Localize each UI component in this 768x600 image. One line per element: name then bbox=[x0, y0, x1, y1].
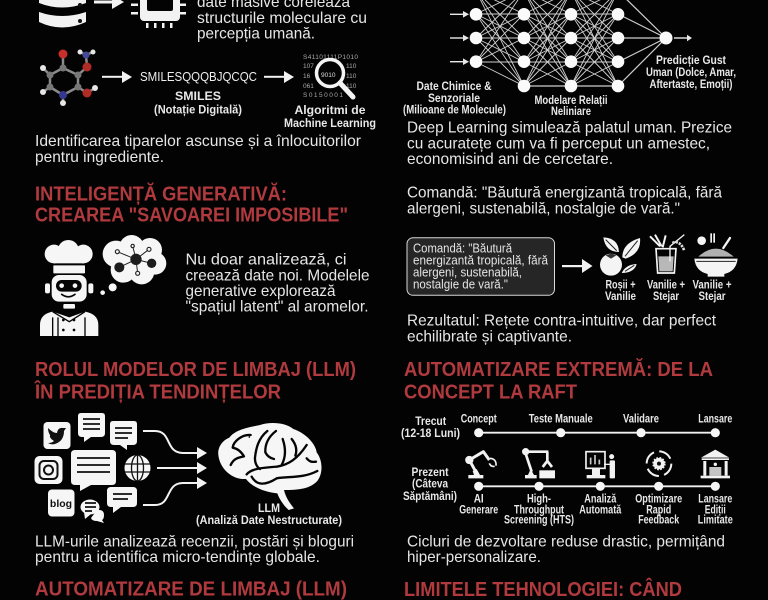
label: machine learning algorithm: Algoritmi de bbox=[294, 105, 366, 117]
label: LLM: (Analiză Date Nestructurate) bbox=[196, 515, 342, 527]
label: present period bbox=[403, 467, 457, 503]
label: present steps: Feedback bbox=[638, 514, 680, 526]
icon: robot chef bbox=[40, 240, 98, 336]
label: present steps: Automată bbox=[579, 504, 622, 516]
icon: processor chip bbox=[131, 0, 186, 28]
arrow: molecule to SMILES bbox=[102, 71, 132, 83]
label: human taste prediction bbox=[646, 55, 736, 91]
label: machine learning algorithm bbox=[284, 105, 376, 130]
chart: past timeline: Concept bbox=[461, 413, 497, 425]
text: deep learning: Deep Learning simulează palatul uman. Prezice bbox=[407, 120, 732, 137]
label: present steps: Rapid bbox=[646, 504, 671, 516]
icon: binary data with magnifier: 9010 bbox=[321, 72, 336, 79]
label: SMILES notation: SMILES bbox=[175, 91, 221, 103]
label: chemical and sensory data: (Milioane de Molecule) bbox=[403, 105, 506, 117]
panel: data correlation top left bbox=[39, 0, 367, 42]
label: SMILES notation bbox=[154, 91, 242, 117]
label: chemical and sensory data bbox=[403, 81, 506, 117]
text: pattern identification bbox=[35, 133, 362, 166]
heading: generative intelligence bbox=[35, 182, 348, 226]
label: ingredient pairs bbox=[605, 280, 732, 303]
callout: prompt box: energizantă tropicală, fără bbox=[413, 253, 548, 267]
label: ingredient pairs: Roșii + bbox=[606, 280, 636, 292]
label: ingredient pairs: Vanilie + bbox=[647, 280, 685, 292]
label: present steps: AI bbox=[474, 494, 484, 506]
arrow: database to chip bbox=[94, 0, 124, 9]
label: ingredient pairs: Stejar bbox=[698, 291, 726, 303]
arrows: neural network inputs and output bbox=[450, 11, 692, 65]
heading: extreme automation bbox=[404, 358, 713, 404]
label: past period: Trecut bbox=[415, 416, 446, 428]
icon: robot arm bbox=[467, 452, 496, 478]
heading: extreme automation: AUTOMATIZARE EXTREMĂ: DE LA bbox=[404, 358, 713, 381]
label: machine learning algorithm: Machine Learning bbox=[284, 118, 376, 130]
text: SMILES string: SMILESQQQBJQCQC bbox=[140, 70, 257, 84]
label: human taste prediction: Predicție Gust bbox=[656, 55, 726, 67]
heading: extreme automation: CONCEPT LA RAFT bbox=[404, 382, 577, 404]
text: LLM analysis: pentru a identifica micro-tendințe globale. bbox=[35, 549, 320, 566]
text: result: echilibrate și captivante. bbox=[407, 328, 572, 345]
chart: present timeline bbox=[474, 482, 720, 491]
heading: language models role bbox=[34, 359, 356, 404]
arrow: prompt to recipes bbox=[562, 259, 592, 273]
text: data correlation: percepția umană. bbox=[197, 26, 315, 42]
icon: binary data with magnifier: 107 bbox=[303, 63, 314, 70]
panel: neural network bbox=[403, 0, 736, 168]
text: LLM analysis bbox=[35, 534, 354, 566]
text: result: Rezultatul: Rețete contra-intuitive, dar perfect bbox=[407, 312, 717, 329]
label: present steps: Generare bbox=[459, 504, 498, 516]
icon: launch building bbox=[701, 450, 730, 478]
label: present steps: Ediții bbox=[705, 504, 726, 516]
callout: prompt box: alergeni, sustenabilă, bbox=[413, 266, 522, 280]
text: data correlation: structurile moleculare cu bbox=[197, 10, 367, 27]
icon: binary data with magnifier bbox=[303, 54, 358, 99]
icon: thought cloud with molecule bbox=[100, 235, 166, 295]
chart: neural network connections bbox=[476, 0, 666, 86]
label: LLM: LLM bbox=[258, 503, 280, 515]
label: present steps: Screening (HTS) bbox=[504, 514, 574, 526]
label: human taste prediction: Uman (Dolce, Amar, bbox=[646, 67, 736, 79]
panel: prompt to recipes bbox=[407, 185, 738, 345]
chart: neural network nodes bbox=[470, 8, 672, 92]
callout: prompt box: nostalgie de vară." bbox=[413, 278, 508, 292]
icon: binary data with magnifier: 110 bbox=[346, 83, 357, 90]
label: present period: Săptămâni) bbox=[403, 491, 457, 503]
chart: past timeline bbox=[461, 413, 732, 437]
label: ingredient pairs: Stejar bbox=[653, 291, 679, 303]
heading: language models role: ROLUL MODELOR DE LIMBAJ (LLM) bbox=[35, 359, 356, 381]
chart: past timeline: Teste Manuale bbox=[529, 413, 593, 425]
icon: rapid feedback cycle bbox=[647, 451, 671, 476]
label: present period: (Câteva bbox=[412, 479, 449, 491]
label: SMILES notation: (Notație Digitală) bbox=[154, 105, 242, 117]
label: nonlinear relations: Modelare Relații bbox=[534, 95, 608, 107]
label: present steps bbox=[459, 494, 733, 526]
text: prompt sentence bbox=[407, 185, 722, 217]
text: deep learning: economisind ani de cercetare. bbox=[407, 151, 613, 168]
text: result bbox=[407, 312, 717, 345]
label: human taste prediction: Aftertaste, Emoții) bbox=[650, 79, 733, 91]
icon: binary data with magnifier: 16 bbox=[303, 73, 311, 80]
text: data correlation bbox=[197, 0, 367, 42]
text: pattern identification: pentru ingrediente. bbox=[35, 149, 164, 166]
text: prompt sentence: Comandă: "Băutură energizantă tropicală, fără bbox=[407, 185, 722, 202]
label: present steps: High- bbox=[527, 494, 551, 506]
icon: binary data with magnifier: S41101111P1010 bbox=[303, 54, 358, 61]
label: present steps: Analiză bbox=[584, 494, 617, 506]
text: latent space: Nu doar analizează, ci bbox=[186, 251, 346, 268]
icon: automated analysis workstation bbox=[586, 452, 615, 478]
text: development cycles bbox=[407, 534, 725, 566]
text: pattern identification: Identificarea tiparelor ascunse și a înlocuitorilor bbox=[35, 133, 362, 150]
text: development cycles: hiper-personalizare. bbox=[407, 549, 541, 566]
label: chemical and sensory data: Senzoriale bbox=[428, 93, 480, 105]
text: deep learning bbox=[407, 120, 732, 168]
icon: bowl bbox=[694, 233, 738, 277]
panel: LLM trend flow bbox=[34, 413, 354, 566]
label: nonlinear relations bbox=[534, 95, 608, 118]
text: prompt sentence: alergeni, sustenabilă, nostalgie de vară." bbox=[407, 200, 680, 217]
icon: social media sources bbox=[34, 413, 150, 523]
icon: binary data with magnifier: S0150001 bbox=[303, 92, 343, 99]
label: ingredient pairs: Vanilie + bbox=[692, 280, 732, 292]
icon: binary data with magnifier: 110 bbox=[346, 73, 357, 80]
text: deep learning: cu acuratețe cum va fi perceput un amestec, bbox=[407, 135, 710, 152]
label: present steps: Optimizare bbox=[635, 494, 682, 506]
icon: binary data with magnifier: 061 bbox=[303, 83, 314, 90]
panel: generative chef robot bbox=[40, 235, 370, 336]
arrow: SMILES to algorithm bbox=[264, 71, 294, 83]
text: latent space: creează date noi. Modelele bbox=[186, 268, 370, 284]
icon: molecule bbox=[40, 50, 98, 106]
icon: high-throughput robot bbox=[523, 449, 555, 478]
heading: language models role: ÎN PREDIȚIA TENDINȚELOR bbox=[34, 380, 282, 404]
label: past period bbox=[401, 416, 460, 440]
label: present steps: Throughput bbox=[514, 504, 564, 516]
label: LLM bbox=[196, 503, 342, 527]
icon: binary data with magnifier: 110 bbox=[346, 63, 357, 70]
label: present period: Prezent bbox=[412, 467, 449, 479]
text: latent space: "spațiul latent" al aromelor. bbox=[186, 299, 368, 316]
label: present steps: Limitate bbox=[698, 514, 733, 526]
icon: drink glass bbox=[650, 235, 684, 273]
callout: prompt box: Comandă: "Băutură bbox=[413, 241, 512, 255]
callout: prompt box bbox=[407, 238, 554, 295]
panel: SMILES machine learning flow bbox=[35, 50, 376, 166]
icon: brain bbox=[218, 423, 322, 510]
label: past period: (12-18 Luni) bbox=[401, 428, 460, 440]
label: ingredient pairs: Vanilie bbox=[605, 291, 636, 303]
heading: generative intelligence: CREAREA "SAVOAREI IMPOSIBILE" bbox=[35, 204, 348, 226]
label: nonlinear relations: Neliniare bbox=[551, 106, 591, 118]
text: development cycles: Cicluri de dezvoltare reduse drastic, permițând bbox=[407, 534, 725, 551]
chart: past timeline: Lansare bbox=[698, 413, 732, 425]
arrows: sources to LLM bbox=[143, 431, 207, 505]
label: present steps: Lansare bbox=[698, 494, 732, 506]
icon: database bbox=[39, 0, 86, 28]
text: latent space bbox=[186, 251, 370, 316]
icon: social media sources: blog bbox=[50, 498, 72, 510]
label: chemical and sensory data: Date Chimice & bbox=[416, 81, 492, 93]
chart: past timeline: Validare bbox=[623, 413, 659, 425]
icon: tomato and leaves bbox=[600, 237, 640, 276]
text: LLM analysis: LLM-urile analizează recenzii, postări și bloguri bbox=[35, 534, 354, 551]
text: latent space: generative explorează bbox=[186, 283, 336, 300]
heading: generative intelligence: INTELIGENȚĂ GENERATIVĂ: bbox=[35, 182, 287, 206]
panel: development timeline bbox=[401, 413, 733, 566]
